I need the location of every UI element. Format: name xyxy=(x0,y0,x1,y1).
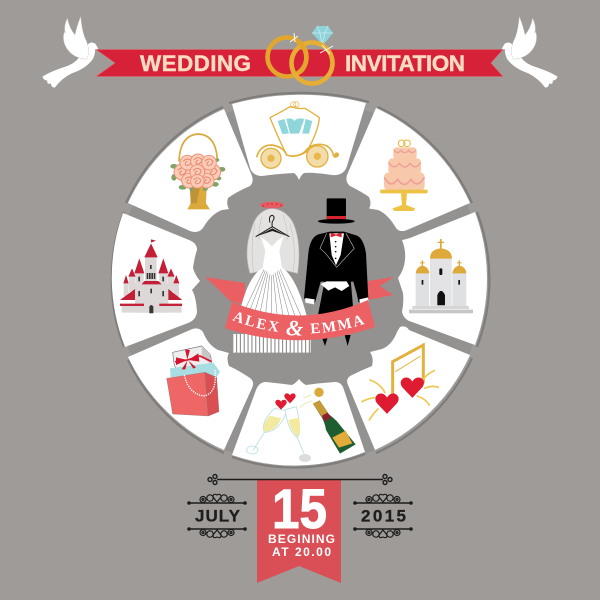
text: couple names: & xyxy=(286,320,303,336)
panel: church segment xyxy=(398,212,487,345)
panel: champagne segment xyxy=(232,379,365,466)
icon: wedding rings xyxy=(268,26,333,84)
illustration: tuxedo xyxy=(304,198,369,346)
icon: wedding cake xyxy=(380,140,428,211)
icon: shopping bag and gifts xyxy=(167,346,220,416)
icon: right dove xyxy=(502,17,558,87)
top ornament line xyxy=(208,474,392,484)
year block: 2015 xyxy=(361,506,406,526)
panel: music segment xyxy=(347,326,470,450)
date flag xyxy=(257,480,341,583)
icon: flower basket xyxy=(170,134,225,209)
illustration: wedding dress xyxy=(233,202,311,343)
panel: basket segment xyxy=(128,109,253,232)
text: time: AT 20.00 xyxy=(272,545,331,559)
heading: wedding: WEDDING xyxy=(140,51,251,76)
text: couple names: ALEX xyxy=(232,312,279,332)
text: begining: BEGINING xyxy=(268,532,335,546)
panel: cake segment xyxy=(346,108,470,231)
couple illustration: ribbon tails xyxy=(205,277,394,305)
icon: champagne glasses and bottle xyxy=(247,388,356,462)
icon: castle xyxy=(120,239,182,313)
panel: castle segment xyxy=(112,213,200,347)
date number: 15 xyxy=(272,477,327,540)
heading: invitation: INVITATION xyxy=(345,51,465,76)
name banner xyxy=(225,300,375,340)
icon: carriage xyxy=(257,102,339,168)
wheel: inner disc xyxy=(116,98,484,466)
month block xyxy=(187,494,247,538)
panel: carriage segment xyxy=(232,95,366,180)
year block xyxy=(353,494,413,538)
icon: church xyxy=(409,239,473,313)
icon: left dove xyxy=(42,17,98,87)
text: couple names: EMMA xyxy=(310,316,365,334)
icon: music note with hearts xyxy=(362,345,438,420)
month block: JULY xyxy=(195,506,241,526)
top ribbon xyxy=(96,50,503,76)
panel: gift segment xyxy=(128,328,253,450)
wheel: outer shadow arcs xyxy=(112,93,489,468)
